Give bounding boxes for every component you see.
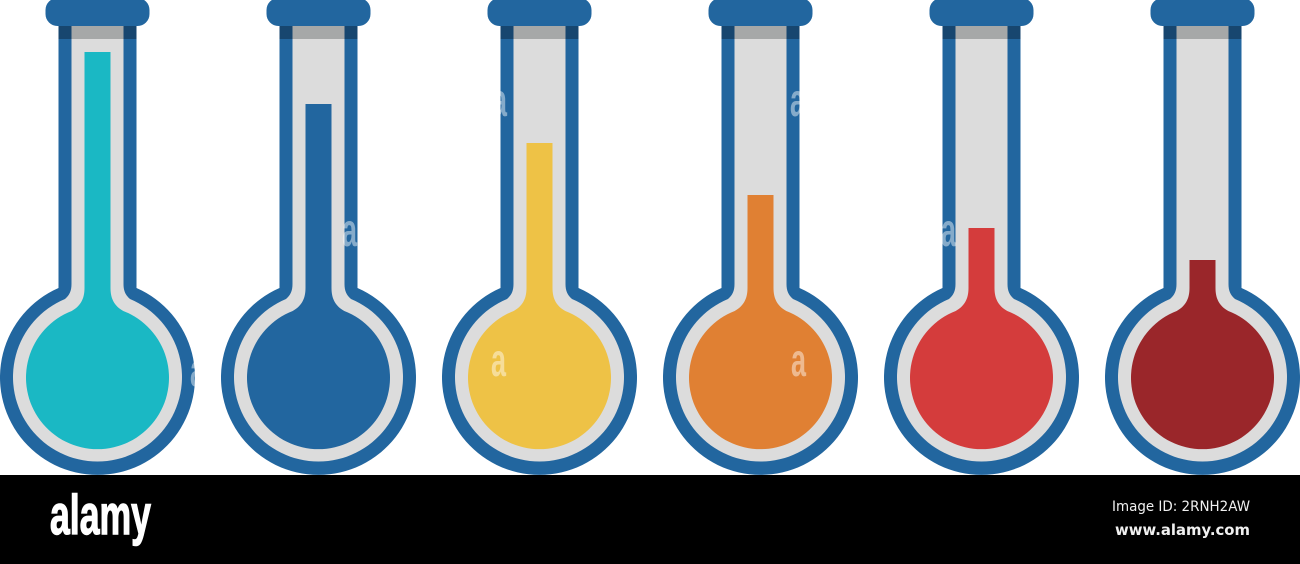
watermark letters: a <box>190 344 205 396</box>
watermark letters: a <box>791 334 806 386</box>
thermometer 3: yellow <box>442 0 637 475</box>
image id: Image ID: 2RNH2AW <box>1112 499 1250 515</box>
watermark letters: a <box>342 204 357 256</box>
website: www.alamy.com <box>1115 521 1250 539</box>
thermometer 2: blue <box>221 0 416 475</box>
watermark letters: a <box>790 74 805 126</box>
footer logo: alamy <box>50 483 151 546</box>
watermark letters: a <box>492 74 507 126</box>
watermark letters: a <box>941 204 956 256</box>
thermometer 6: dark red, lowest level <box>1105 0 1300 475</box>
thermometer 5: red <box>884 0 1079 475</box>
footer band <box>0 475 1300 564</box>
watermark letters <box>190 74 956 396</box>
watermark letters: a <box>491 334 506 386</box>
thermometer 1: teal, highest level <box>0 0 195 475</box>
thermometer 4: orange <box>663 0 858 475</box>
